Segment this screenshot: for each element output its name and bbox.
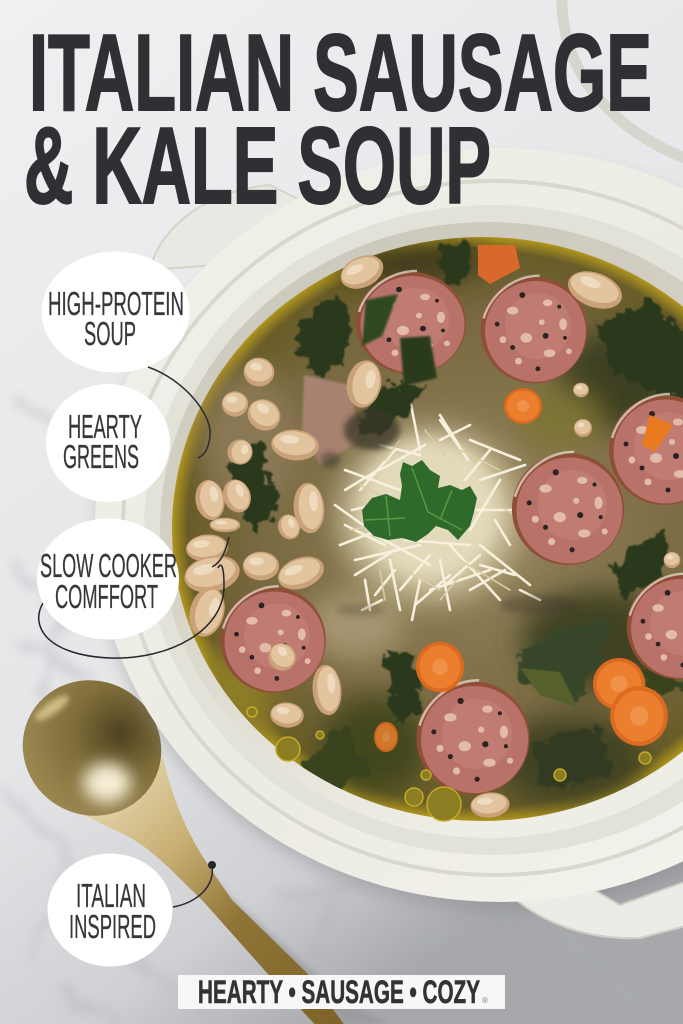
callout connector: slow cooker: [39, 537, 229, 658]
broth colour patches: [195, 242, 682, 805]
sausage slices: [220, 271, 683, 795]
beans: [181, 249, 680, 819]
bottom banner: ®: [482, 996, 488, 1005]
soup: [172, 237, 683, 821]
spoon handle: [70, 758, 348, 1024]
callout connector: italian inspired: [173, 861, 216, 907]
callout: high-protein soup: SOUP: [84, 315, 136, 352]
broth: [172, 237, 683, 821]
callout: hearty greens: HEARTY: [68, 408, 142, 445]
bowl highlights: [83, 763, 131, 803]
callout: hearty greens: [46, 384, 170, 502]
fat bubbles: [247, 707, 651, 821]
callout: slow cooker comfort: SLOW COOKER: [40, 547, 177, 584]
gold ladle spoon: [0, 655, 390, 1024]
kale garnish: [362, 460, 477, 542]
callout: hearty greens: GREENS: [63, 438, 139, 475]
pot handle top left: [150, 185, 300, 270]
pot handle bottom right: [510, 870, 683, 938]
carrots: [374, 245, 673, 752]
pot body: [95, 148, 683, 902]
top right pot lid rim: [562, 0, 683, 160]
kale on sausage: [362, 294, 437, 386]
spoon shadow: [160, 790, 390, 1024]
bottom banner: [178, 974, 505, 1010]
callout connector: high-protein: [148, 367, 210, 458]
shredded parmesan: [335, 400, 540, 620]
spoon bowl: [0, 655, 186, 841]
callout: italian inspired: INSPIRED: [69, 908, 156, 945]
title: [24, 12, 652, 227]
callout: italian inspired: ITALIAN: [76, 877, 146, 914]
bottom banner: HEARTY • SAUSAGE • COZY: [198, 974, 480, 1010]
olive leaf: [520, 668, 578, 708]
kale leaves in broth: [228, 245, 683, 795]
callout: italian inspired: [48, 854, 172, 966]
callout: high-protein soup: [42, 252, 190, 372]
callout: slow cooker comfort: [37, 518, 179, 640]
pot shadow: [97, 160, 683, 910]
callout: slow cooker comfort: COMFFORT: [55, 578, 158, 615]
callout: high-protein soup: HIGH-PROTEIN: [48, 285, 184, 322]
pepper patch: [320, 410, 580, 616]
slow cooker pot: [95, 148, 683, 938]
